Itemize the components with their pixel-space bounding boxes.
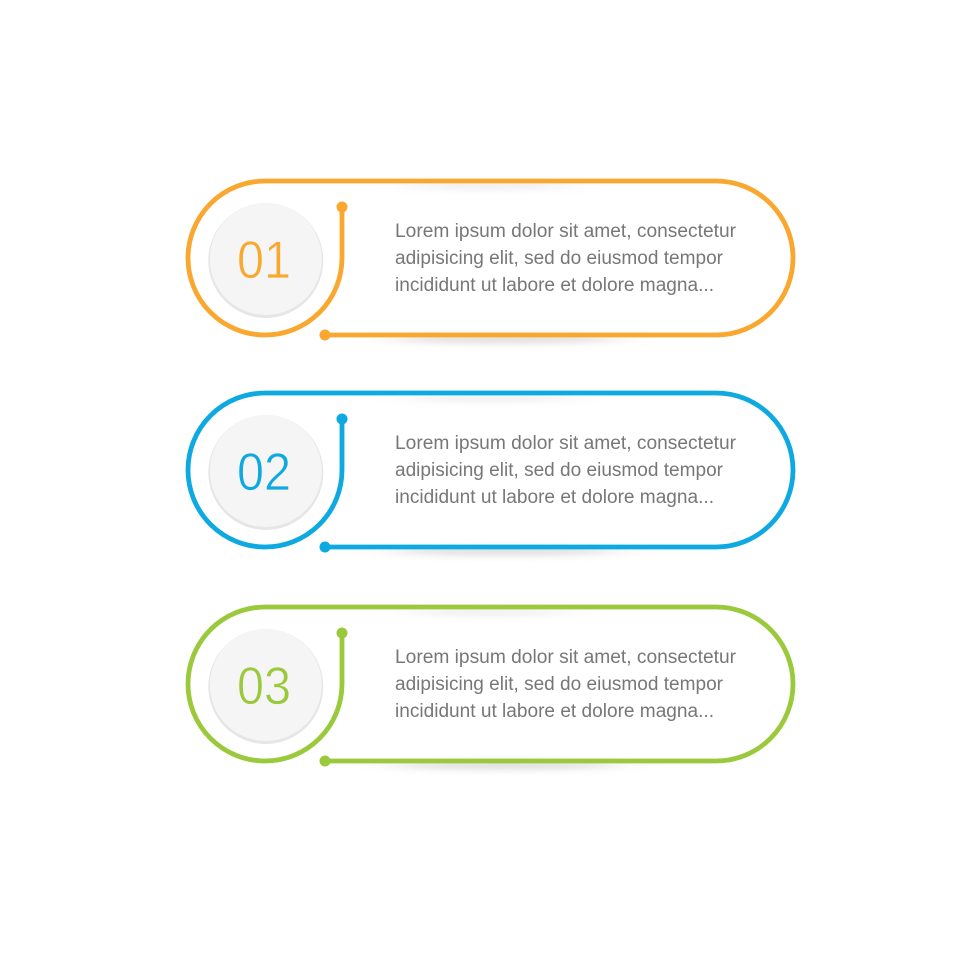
number badge: step 02: 02 (237, 443, 291, 502)
number badge: step 03: 03 (237, 657, 291, 716)
dot: step 03 bottom (320, 756, 330, 766)
text: step 02 (395, 433, 737, 508)
panel: step 02 (188, 393, 793, 556)
text: step 03: adipisicing elit, sed do eiusmod tempor (395, 674, 724, 695)
text: step 03: incididunt ut labore et dolore magna... (395, 701, 714, 722)
number badge: step 03 (208, 629, 323, 744)
text: step 03: Lorem ipsum dolor sit amet, consectetur (395, 647, 737, 668)
outline: step 02 (188, 393, 793, 547)
text: step 02: adipisicing elit, sed do eiusmod tempor (395, 460, 724, 481)
dot: step 03 top (336, 628, 348, 638)
text: step 02: incididunt ut labore et dolore magna... (395, 487, 714, 508)
text: step 01: Lorem ipsum dolor sit amet, consectetur (395, 221, 737, 242)
dot: step 02 top (336, 414, 348, 424)
number badge: step 01: 01 (237, 231, 291, 290)
number badge: step 02 (208, 415, 323, 530)
text: step 01 (395, 221, 737, 296)
text: step 03 (395, 647, 737, 722)
dot: step 02 bottom (320, 542, 330, 552)
text: step 02: Lorem ipsum dolor sit amet, consectetur (395, 433, 737, 454)
text: step 01: adipisicing elit, sed do eiusmod tempor (395, 248, 724, 269)
panel: step 01 (188, 181, 793, 344)
outline: step 01 (188, 181, 793, 335)
dot: step 01 bottom (320, 330, 330, 340)
number badge: step 01 (208, 203, 323, 318)
dot: step 01 top (336, 202, 348, 212)
panel: step 03 (188, 607, 793, 770)
outline: step 03 (188, 607, 793, 761)
text: step 01: incididunt ut labore et dolore magna... (395, 275, 714, 296)
